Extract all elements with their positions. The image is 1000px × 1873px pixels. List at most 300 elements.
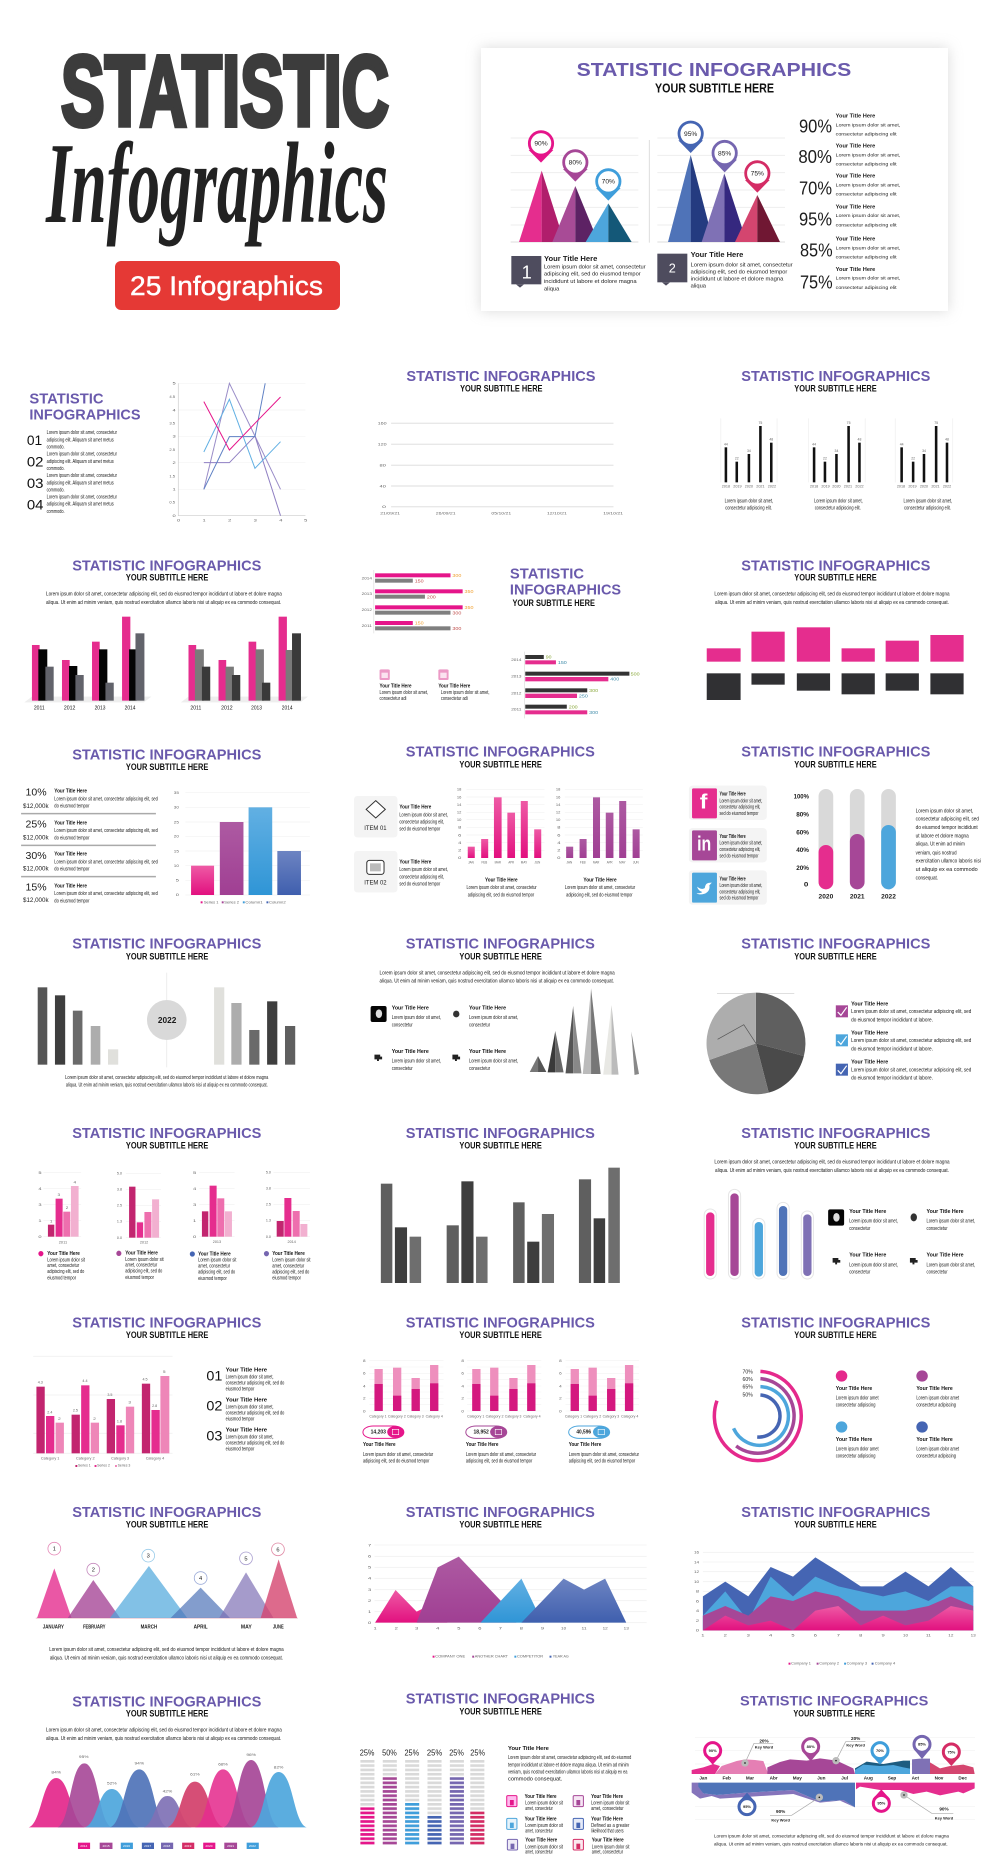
percentage list: Lorem ipsum dolor sit amet, [836,276,900,282]
thin bar chart 3: 2020 [920,485,928,489]
icon list: Your Title Here [469,1048,506,1054]
panel: area peaks slide [368,1504,647,1659]
horizontal bar chart bottom [511,652,640,718]
horizontal bar chart top: 300 [452,574,462,578]
small chart 2012: eiusmod tempor [125,1274,154,1280]
callout 1 [511,254,646,292]
year chips: 2015 [103,1844,110,1848]
numbered list: 03 [206,1428,222,1444]
small chart 2013: amet, consectetur [198,1263,230,1269]
icon list: Lorem ipsum dolor sit amet, [849,1218,898,1224]
stacked area chart: 4 [769,1634,772,1638]
description [508,1745,631,1782]
percentage list: Lorem ipsum dolor sit amet, [836,213,900,219]
map pins: 85% [918,1742,926,1747]
3D bar chart right: 2011 [190,705,201,711]
monthly bar chart purple: 2 [557,849,560,853]
heading [577,59,851,96]
category bar chart: Category 4 [146,1457,164,1461]
heading: YOUR SUBTITLE HERE [794,1141,877,1151]
month labels: Nov [935,1775,944,1780]
panel: spikes slide [371,936,639,1075]
monthly bar chart pink [457,788,544,898]
area chart: COMPETITOR [517,1655,543,1659]
thin bar chart 2: 22 [823,457,827,461]
thin bar chart 1: 2022 [768,485,776,489]
small chart 2012: 2.5 [117,1204,122,1208]
small chart 2011: 1 [50,1220,52,1224]
panel: social media pills slide: consectetur adipiscing elit, [720,889,760,895]
callout 2: adipiscing elit, sed do eiusmod tempor [691,270,787,276]
panel: social media pills slide: Lorem ipsum dolor sit amet, [720,840,762,846]
area chart: 13 [624,1627,629,1631]
line chart: 4 [279,519,282,523]
3D bar chart left: 2012 [64,705,75,711]
icon list: Your Title Here [927,1208,964,1214]
panel: social media pills slide: sed do eiusmod tempor [720,853,759,859]
stacked area chart: 11 [926,1634,931,1638]
month labels: Abr [770,1775,778,1780]
text: consectetur adipiscing elit, sed do [226,1380,284,1386]
block chart [707,627,964,700]
grid chart: 40 [380,485,386,489]
heading: STATISTIC INFOGRAPHICS [406,1691,595,1707]
panel: horizontal bars slide [362,565,640,718]
monthly bar chart pink: 12 [457,811,461,815]
monthly bar chart purple: JUN [633,861,639,865]
stacked chart 3: 2 [559,1397,562,1401]
heading: YOUR SUBTITLE HERE [794,383,877,394]
striped column chart [360,1747,485,1846]
small chart 2011: 4 [38,1187,42,1191]
stacked chart 1: 4 [363,1385,366,1389]
heading: STATISTIC [510,565,584,582]
monthly bar chart pink: FEB [481,861,487,865]
panel: items and monthly bars slide [354,744,643,898]
stacked chart 2: 6 [461,1372,464,1376]
heading: YOUR SUBTITLE HERE [794,1520,877,1530]
small chart 2014: 5.0 [266,1171,271,1175]
heading [72,1314,261,1341]
panel: line chart slide: Lorem ipsum dolor sit amet, consectetur [47,429,117,435]
icon notes: Lorem ipsum dolor sit amet, [380,689,428,695]
triangle chart: MAY [241,1624,252,1630]
grid chart: 26/09/21 [436,512,456,516]
icon list: Lorem ipsum dolor sit amet, [392,1014,441,1020]
panel: bell curves slide: Lorem ipsum dolor sit amet, consectetur adipiscing elit, sed do eiusmod tempor incididunt ut labore et dolore magna [46,1727,282,1733]
stacked chart 2: Category 2 [486,1415,504,1419]
year chips: 2018 [163,1844,171,1848]
stacked area chart: 13 [971,1634,976,1638]
panel: four small bar charts slide: adipiscing elit, sed do [198,1269,235,1275]
percent list: do eiusmod tempor [54,866,90,872]
stacked area chart: 8 [859,1634,862,1638]
radial chart: 70% [743,1369,753,1375]
percent list: Your Title Here [54,883,87,889]
percent list: Your Title Here [54,788,87,794]
area chart: 12 [603,1627,608,1631]
3D bar chart right: 2014 [282,705,293,711]
percentage list: 70% [799,178,832,199]
pill chart: 40% [796,847,809,854]
stacked area chart: 1 [701,1634,704,1638]
callout 1: 1 [522,261,532,282]
callout 2: aliqua [691,284,707,290]
monthly bar chart pink: MAY [521,861,527,865]
key word callouts: Key Word [771,1817,790,1822]
panel: items and monthly bars slide: sed do eiusmod tempor [399,826,441,832]
thin bar chart 2: 44 [812,443,816,447]
icon grid [507,1793,630,1855]
text: Lorem ipsum dolor sit amet, consectetur [565,884,635,890]
panel: percent list and bars slide: Lorem ipsum dolor sit amet, consectetur adipiscing elit, sed [54,859,158,865]
grid chart: 05/10/21 [491,512,511,516]
icon notes: consectetur adi [380,695,407,701]
item 01 [354,796,448,837]
icon notes: consectetur adi [441,695,468,701]
stacked area chart: 7 [837,1634,840,1638]
percentage list: Your Title Here [836,267,875,273]
monthly bar chart purple: 4 [557,841,560,845]
stacked area chart: 8 [696,1590,699,1594]
heading [740,1693,928,1719]
checklist: Your Title Here [851,1030,889,1036]
text: aliqua. Ut enim ad minim veniam, quis nostrud exercitation ullamco laboris nisi ut aliquip ex ea commodo consequat. [714,1842,948,1847]
panel: four small bar charts slide: Lorem ipsum dolor sit [47,1257,85,1263]
small chart 2013: 5 [193,1171,196,1175]
stacked chart 2 [461,1359,541,1464]
numbered list: commodo. [47,508,65,514]
intro text [46,591,282,605]
month labels: Act [912,1775,920,1780]
icon list: Your Title Here [927,1252,964,1258]
3D bar chart right: 2012 [221,705,233,711]
bar chart [174,791,310,905]
small chart 2011: Your Title Here [47,1250,80,1256]
bell curve chart: 52% [107,1782,117,1786]
small chart 2014: amet, consectetur [272,1263,304,1269]
heading: YOUR SUBTITLE HERE [459,1520,542,1530]
thin bar chart 3: 2021 [931,485,940,489]
year chips: 2016 [123,1844,130,1848]
text: Lorem ipsum dolor sit amet, [226,1404,273,1410]
social card: twitter: Your Title Here [720,876,746,882]
horizontal bar chart bottom: 2011 [511,708,521,712]
category bar chart: 2.5 [73,1409,78,1413]
horizontal bar chart top: 2012 [362,608,372,612]
social card: facebook [689,786,767,820]
horizontal bar chart bottom: 200 [569,705,578,710]
pie chart [707,993,805,1094]
year chips: 2022 [249,1844,256,1848]
category bar chart [33,1356,173,1468]
percentage list: Your Title Here [836,114,875,120]
panel: social media pills slide: consectetur adipiscing elit, [720,804,760,810]
horizontal bar chart top: 2013 [362,592,372,596]
thin bar chart 3: 2019 [908,485,917,489]
icon list [828,1208,975,1275]
text: likelihood that users [591,1828,624,1834]
percent list: 15% [26,882,47,893]
callout 2: Lorem ipsum dolor sit amet, consectetur [691,263,793,269]
triangle chart: JANUARY [43,1624,64,1630]
monthly bar chart purple: 8 [557,826,560,830]
percentage list: Your Title Here [836,144,875,150]
panel: empty grid chart slide [378,368,623,516]
stacked chart 3: 8 [559,1359,562,1363]
horizontal bar chart top: 2011 [362,624,372,628]
monthly bar chart purple: Your Title Here [583,877,617,883]
panel: spikes slide: Lorem ipsum dolor sit amet, consectetur adipiscing elit, sed do eiusmod tempor incididunt ut labore et dolore magna [380,970,615,976]
monthly bar chart purple: 14 [556,803,560,807]
line chart: 0 [177,519,180,523]
bar chart: 25 [174,821,179,825]
icon grid: Lorem ipsum dolor sit [525,1844,563,1850]
checklist: Your Title Here [851,1059,889,1065]
bell curve chart: 96% [246,1753,256,1757]
area chart: 6 [368,1555,371,1559]
key word callouts: 20% [851,1736,861,1741]
small chart 2013: 0 [193,1235,196,1239]
icon grid: amet, consectetur [525,1805,553,1811]
panel: triangle months slide: Lorem ipsum dolor sit amet, consectetur adipiscing elit, sed do eiusmod tempor incididunt ut labore et dolore magna [49,1646,284,1652]
checklist [836,1001,971,1081]
year chips: 2014 [80,1844,88,1848]
heading [406,368,596,394]
description [916,808,981,881]
horizontal bar chart top: 300 [452,611,462,616]
monthly bar chart purple: 12 [556,811,560,815]
icon grid: amet, consectetur [591,1805,624,1811]
map pins: 70% [876,1748,884,1753]
monthly bar chart purple: 18 [556,788,560,792]
pill chart: 2022 [881,893,896,900]
area chart: 9 [541,1627,544,1631]
thin bar chart 2: 2022 [855,485,864,489]
thin bar chart 2: 48 [858,438,861,442]
heading: YOUR SUBTITLE HERE [459,759,542,770]
panel: triangle months slide [36,1504,298,1661]
panel: line chart slide: adipiscing elit. Aliquam sit amet metus [47,480,114,486]
line chart: 3.5 [169,422,175,426]
icon list: Your Title Here [392,1048,429,1054]
panel: thin bar charts slide: consectetur adipiscing elit. [815,505,861,511]
pyramid chart right [657,122,785,242]
bell curve chart: 68% [218,1763,228,1767]
bar chart: 10 [174,864,179,868]
percentage list: Your Title Here [836,204,875,210]
panel: social media pills slide [689,744,981,905]
icon grid: Lorem ipsum dolor sit [525,1800,563,1806]
thin bar chart 2: 75 [847,421,851,425]
spike chart [530,988,639,1075]
panel: social media pills slide: sed do eiusmod tempor [720,810,759,816]
small chart 2013: 2013 [213,1240,221,1244]
small chart 2014: eiusmod tempor [272,1275,301,1281]
numbered list [27,429,117,514]
heading [406,1691,595,1717]
heading: YOUR SUBTITLE HERE [126,573,208,583]
horizontal bar chart bottom: 300 [589,711,598,715]
stacked area chart: 10 [903,1634,908,1638]
small chart 2014: 2.5 [266,1203,271,1207]
panel: pie chart slide [707,936,971,1094]
line chart: 1 [203,519,206,523]
panel: featured preview card [481,48,948,311]
stacked area chart: 5 [791,1634,795,1638]
stacked chart 1: Category 1 [369,1415,387,1419]
line chart: 2 [173,461,176,465]
icon grid: Your Title Here [592,1837,624,1843]
panel: items and monthly bars slide: Lorem ipsum dolor sit amet, [399,866,448,872]
monthly bar chart purple: MAR [593,861,599,865]
stacked chart 2: 2 [461,1397,464,1401]
triangle chart: 4 [199,1575,202,1581]
bar chart: 30 [174,806,179,810]
heading [741,368,930,394]
line chart: 3 [173,435,176,439]
grouped bar chart [381,1168,620,1283]
category bar chart: Category 3 [111,1457,129,1461]
small chart 2011: amet, consectetur [47,1262,79,1268]
category bar chart: 2.8 [152,1404,157,1408]
monthly bar chart pink: 4 [458,841,461,845]
icon list: consectetur [392,1065,413,1071]
category bar chart: 3 [128,1401,131,1405]
triangle chart: JUNE [273,1624,284,1630]
numbered list: 01 [27,433,42,448]
panel: stacked bars slide [363,1314,639,1464]
bar chart: 5 [176,879,179,883]
small chart 2013: eiusmod tempor [198,1275,227,1281]
line chart: 0 [173,514,176,518]
category bar chart: Series 3 [118,1464,130,1468]
description: commodo consequat. [508,1776,562,1782]
panel: bell curves slide [29,1693,307,1849]
horizontal bar chart bottom: 2012 [511,692,521,696]
item 02: Your Title Here [399,859,432,865]
heading [741,744,930,770]
thin bar chart 3: 34 [922,449,926,453]
category bar chart: Series 2 [97,1464,110,1468]
monthly bar chart purple: MAY [619,861,626,865]
month labels: Dec [958,1775,967,1780]
social card: linkedin [689,828,767,862]
pyramid chart right: 95% [684,131,697,138]
timeline upper areas [692,1737,975,1819]
stacked chart 3: Category 4 [621,1415,638,1419]
stacked chart 3 [559,1359,639,1464]
small chart 2011: 2 [66,1206,68,1210]
panel: 3D bar charts slide: Lorem ipsum dolor sit amet, consectetur adipiscing elit, sed do eiusmod tempor incididunt ut labore et dolore magna [46,591,282,597]
percent list: $12,000k [23,834,49,841]
thin bar chart 1: 2019 [733,485,742,489]
pill chart: 20% [796,865,809,872]
small chart 2011: 0 [38,1235,42,1239]
icon list: consectetur [927,1225,948,1231]
monthly bar chart pink: JAN [468,861,474,865]
callout 2: incididunt ut labore et dolore magna [691,277,784,283]
category bar chart: 5 [163,1370,166,1374]
thin bar chart 3: 2022 [943,485,951,489]
thin bar chart 1: 34 [747,449,751,453]
category bar chart: 4.5 [142,1378,148,1382]
thin bar chart 1: 44 [724,443,728,447]
percentage list: consectetur adipiscing elit [836,285,897,291]
percentage list: Lorem ipsum dolor sit amet, [836,122,900,128]
thin bar chart 2: 34 [835,449,838,453]
numbered list: 04 [27,497,44,513]
stacked chart 3: Your Title Here [569,1441,602,1447]
small chart 2013: 4 [193,1187,196,1191]
small chart 2012 [116,1172,164,1280]
triangle chart: 2 [92,1566,95,1573]
stacked chart 1: 0 [363,1410,366,1414]
heading [741,1504,930,1530]
percentage list: consectetur adipiscing elit [836,255,897,261]
percentage list: Lorem ipsum dolor sit amet, [836,245,900,251]
stacked chart 2: 4 [461,1385,464,1389]
panel: four small bar charts slide: adipiscing elit, sed do [47,1268,84,1274]
stacked chart 2: Category 1 [467,1415,484,1419]
panel: thin bar charts slide: consectetur adipiscing elit. [725,505,772,511]
striped column chart: 25% [360,1747,375,1757]
title: STATISTIC: STATISTIC [61,36,389,148]
panel: monthly timeline slide [692,1693,975,1847]
panel: line chart slide: Lorem ipsum dolor sit amet, consectetur [47,451,117,457]
numbered list: commodo. [47,465,65,471]
radial chart [714,1369,801,1461]
pyramid chart left: 90% [534,141,548,148]
thin bar chart 1: 75 [758,421,762,425]
stacked area chart: Company 3 [847,1662,867,1666]
panel: stacked bars slide: Lorem ipsum dolor sit amet, consectetur [363,1451,433,1457]
callout 2: Your Title Here [691,250,743,259]
social card: facebook: f [700,791,708,813]
panel: grouped gray bars slide [381,1125,620,1283]
icon list [371,1005,518,1071]
area chart: 0 [368,1621,371,1625]
panel: triangle months slide: aliqua. Ut enim ad minim veniam, quis nostrud exercitation ullamco laboris nisi ut aliquip ex ea commodo consequat. [50,1655,283,1661]
percent list: Your Title Here [54,851,87,857]
3D bar chart right: 2013 [251,705,262,711]
key word callouts: 90% [939,1807,950,1812]
heading: STATISTIC INFOGRAPHICS [577,59,851,80]
area chart: 2 [395,1627,398,1631]
stacked area chart: 6 [696,1600,699,1604]
heading: INFOGRAPHICS [29,406,141,423]
heading [72,936,261,962]
panel: positive negative blocks slide [707,557,964,700]
map pins: 80% [807,1744,815,1749]
thin bar chart 1: 2020 [745,485,753,489]
heading: STATISTIC INFOGRAPHICS [406,1314,595,1331]
grayscale bars: 2022 [158,1015,176,1025]
heading: YOUR SUBTITLE HERE [126,1520,208,1530]
icon grid: Your Title Here [525,1793,557,1799]
striped column chart: 25% [404,1747,419,1757]
panel: four small bar charts slide: Lorem ipsum dolor sit [125,1256,164,1262]
year chips: 2017 [144,1844,151,1848]
callout 2: 2 [669,262,676,276]
stacked area chart: 10 [694,1580,699,1584]
monthly bar chart pink: 18 [457,788,461,792]
panel: percent list and bars slide [21,746,310,905]
percentage list: 85% [800,240,833,261]
key word callouts: Key Word [846,1743,865,1748]
panel: four small bar charts slide: Lorem ipsum dolor sit [198,1257,237,1263]
text: Lorem ipsum dolor sit [272,1257,311,1263]
